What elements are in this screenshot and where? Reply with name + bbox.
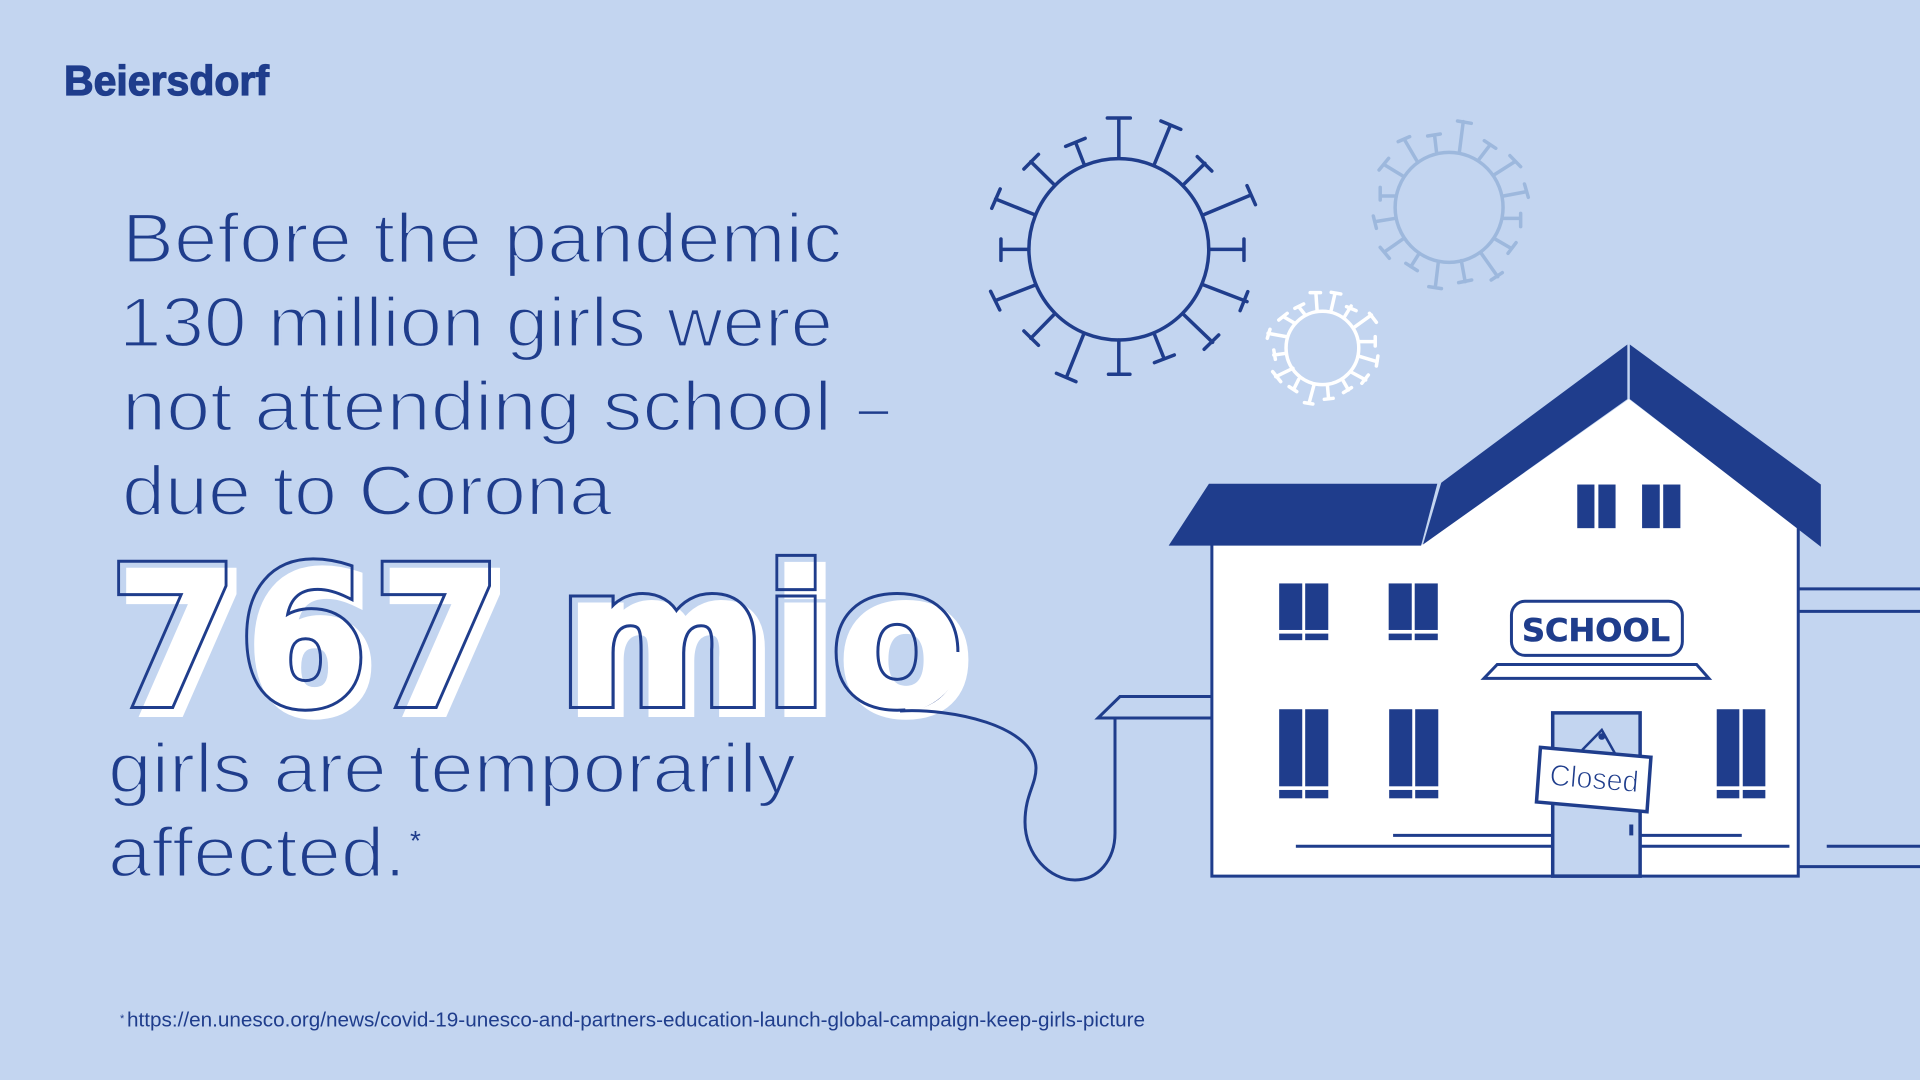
school sign label: SCHOOL — [1522, 613, 1670, 649]
closed sign label: Closed — [1548, 759, 1640, 799]
school sign frame — [1511, 601, 1682, 655]
big number: 767 mio: 7 — [382, 536, 510, 758]
heading text block: 130 million girls were — [119, 283, 833, 362]
steps lines — [1296, 835, 1789, 846]
footnote with source URL: https://en.unesco.org/news/covid-19-unesco-and-partners-education-launch-global-campaign-keep-girls-picture — [127, 1010, 1145, 1032]
sign shelf — [1484, 665, 1709, 678]
big number: 767 mio: i — [774, 535, 836, 757]
big number: 767 mio: i — [765, 527, 827, 749]
subheading text block: girls are temporarily — [108, 729, 797, 808]
side awning left of the school — [1098, 696, 1212, 718]
cable line from the number to the awning — [900, 711, 1115, 880]
logo: Beiersdorf: Beiersdorf — [64, 57, 270, 104]
heading text block: due to Corona — [122, 451, 613, 530]
footnote with source URL: * — [120, 1013, 125, 1025]
subheading text block — [108, 729, 797, 892]
big number: 767 mio: 7 — [119, 536, 246, 758]
big number: 767 mio: m — [558, 527, 766, 750]
icon: small white virus — [1267, 292, 1378, 404]
wall outline — [1212, 528, 1798, 876]
big number: 767 mio: m — [567, 535, 775, 758]
big number: 767 mio: o — [831, 528, 963, 750]
roof: left wing — [1169, 484, 1437, 546]
heading text block — [119, 199, 890, 530]
ground and wall lines right of the school — [1798, 589, 1920, 867]
door handle — [1629, 824, 1633, 835]
big number: 767 mio: 7 — [110, 528, 237, 750]
big number: 767 mio: 6 — [239, 527, 367, 750]
big number: 767 mio — [117, 554, 968, 720]
subheading text block: affected. — [108, 813, 406, 892]
lower windows — [1279, 709, 1765, 798]
heading text block: – — [858, 367, 890, 446]
icon: large dark virus — [991, 118, 1255, 382]
big number: 767 mio: 7 — [373, 528, 501, 750]
roof: main gable left — [1423, 345, 1627, 545]
attic windows — [1577, 485, 1680, 528]
big number: 767 mio: o — [840, 536, 972, 758]
door — [1553, 713, 1640, 876]
big number: 767 mio: 6 — [248, 535, 376, 758]
asterisk: * — [410, 825, 421, 856]
heading text block: Before the pandemic — [122, 199, 842, 278]
icon: pale virus — [1373, 121, 1528, 289]
hanger nail — [1598, 733, 1605, 740]
roof: main gable right — [1630, 345, 1821, 547]
sign hanger — [1582, 730, 1615, 754]
closed sign board — [1536, 747, 1651, 812]
upper windows — [1279, 583, 1438, 640]
building wall — [1212, 399, 1798, 876]
o outline gap overlay — [905, 652, 958, 707]
heading text block: not attending school — [122, 367, 832, 446]
school building — [1169, 345, 1821, 876]
